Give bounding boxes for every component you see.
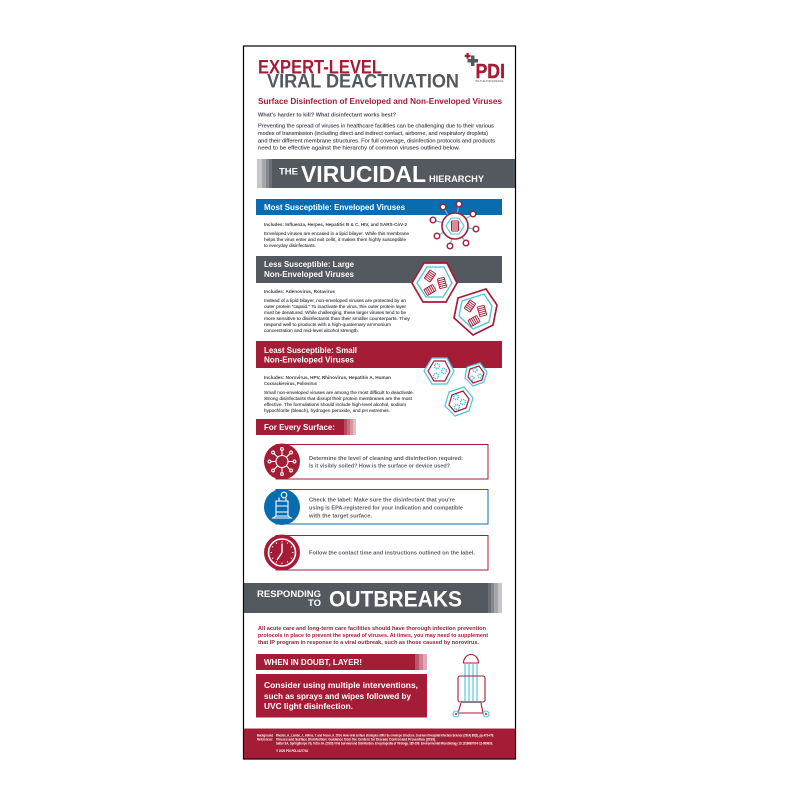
icon: large virus one — [412, 263, 457, 302]
logo: PDI — [465, 53, 505, 83]
intro paragraph: need to be effective against the hierarchy of common viruses outlined below. — [258, 146, 460, 152]
icon: virus in red circle — [264, 444, 300, 480]
step text: Determine the level of cleaning and disinfection required: — [309, 456, 463, 462]
title: EXPERT-LEVEL — [258, 56, 382, 78]
intro paragraph: and their different membrane structures. For full coverage, disinfection protocols and products — [258, 138, 495, 144]
icon: UVC light robot — [453, 654, 489, 717]
outbreak paragraph: All acute care and long-term care facilities should have thorough infection prevention — [258, 626, 487, 632]
footer: references: © 2020 PDI PDI-1127744 — [276, 749, 308, 753]
outbreak paragraph: protocols in place to prevent the spread of viruses. At times, you may need to supplement — [258, 633, 488, 639]
heading band: large non-enveloped viruses: Non-Enveloped Viruses — [264, 269, 354, 279]
section heading: for every surface — [256, 419, 356, 435]
logo: PDI: BE THE DIFFERENCE — [476, 79, 504, 83]
description: Instead of a lipid bilayer, non-enveloped viruses are protected by an — [264, 298, 406, 304]
description: must be denatured. While challenging, these larger viruses tend to be — [264, 310, 406, 316]
intro paragraph — [258, 124, 495, 152]
includes line: Coxsackievirus, Poliovirus — [264, 381, 317, 387]
description: Enveloped viruses are encased in a lipid bilayer. While this membrane — [264, 231, 409, 237]
includes line: Includes: Influenza, Herpes, Hepatitis B & C, HIV, and SARS-CoV-2 — [264, 222, 407, 228]
panel: most susceptible — [256, 199, 502, 249]
callout: consider multiple interventions: such as sprays and wipes followed by — [264, 692, 411, 701]
banner: responding to outbreaks — [244, 583, 502, 613]
description — [264, 298, 411, 334]
section heading: for every surface: For Every Surface: — [264, 422, 335, 432]
panel: less susceptible — [256, 256, 502, 335]
title — [258, 56, 459, 92]
outbreak paragraph: that IP program in response to a viral outbreak, such as those caused by norovirus. — [258, 640, 479, 646]
banner: the virucidal hierarchy: VIRUCIDAL — [301, 161, 426, 187]
icon: disinfectant canister — [264, 489, 300, 525]
description — [264, 390, 414, 414]
subtitle: Surface Disinfection of Enveloped and Non-Enveloped Viruses — [258, 96, 502, 106]
step text — [308, 498, 463, 520]
includes line: Includes: Norovirus, HPV, Rhinovirus, Hepatitis A, Human — [264, 375, 391, 381]
icon: small virus three — [445, 387, 473, 416]
icon: small virus one — [424, 358, 454, 384]
callout: consider multiple interventions: Consider using multiple interventions, — [264, 681, 418, 690]
callout heading: when in doubt, layer: WHEN IN DOUBT, LAYER! — [264, 658, 362, 667]
step text — [309, 456, 463, 470]
description: Small non-enveloped viruses are among the most difficult to deactivate. — [264, 390, 414, 396]
callout: consider multiple interventions — [256, 674, 427, 718]
lead question: What's harder to kill? What disinfectant works best? — [258, 112, 397, 118]
step text: Follow the contact time and instructions outlined on the label. — [309, 550, 475, 556]
description: more sensitive to disinfectants than their smaller counterparts. They — [264, 316, 411, 322]
intro paragraph: modes of transmission (including direct and indirect contact, airborne, and respiratory droplets) — [258, 131, 488, 137]
banner: responding to outbreaks: TO — [308, 598, 321, 609]
banner: the virucidal hierarchy — [257, 159, 515, 188]
description: Strong disinfectants that disrupt their protein membranes are the most — [264, 396, 413, 402]
heading band: enveloped viruses — [256, 199, 502, 215]
banner: responding to outbreaks: RESPONDING — [257, 589, 321, 600]
footer: references: Rhodes, A., Lambe, J., Atkins, T. and Fraser, A. 2014. How viral surface strategies differ by envelope structure. Journal of Hospital Infection Science (2014) 88(2), pp.473-478. — [276, 734, 494, 738]
banner: the virucidal hierarchy: HIERARCHY — [429, 174, 484, 184]
description: effective. The formulations should include high-level alcohol, sodium — [264, 402, 406, 408]
description: respond well to products with a high-quaternary ammonium — [264, 322, 391, 328]
includes line: Includes: Adenovirus, Rotavirus — [264, 289, 335, 295]
intro paragraph: Preventing the spread of viruses in healthcare facilities can be challenging due to their various — [258, 124, 494, 130]
step text: using is EPA-registered for your indication and compatible — [309, 506, 463, 512]
footer: references: References: — [257, 738, 273, 742]
banner: the virucidal hierarchy: THE — [279, 166, 298, 178]
icon: large virus two — [454, 289, 497, 335]
step text: with the target surface. — [308, 514, 372, 520]
includes line — [264, 375, 391, 387]
title: VIRAL DEACTIVATION — [267, 70, 459, 92]
icon: enveloped virus — [430, 201, 479, 249]
description: to everyday disinfectants. — [264, 243, 316, 249]
description: concentration and mid-level alcohol strength. — [264, 328, 359, 334]
logo: PDI: PDI — [476, 61, 505, 83]
heading band: enveloped viruses: Most Susceptible: Enveloped Viruses — [264, 202, 405, 212]
description: helps the virus enter and exit cells, it makes them highly susceptible — [264, 237, 406, 243]
description: outer protein "capsid." To inactivate the virus, this outer protein layer — [264, 304, 406, 310]
outbreak paragraph — [258, 626, 488, 646]
banner: responding to outbreaks: OUTBREAKS — [329, 586, 462, 612]
panel: least susceptible — [256, 341, 502, 416]
step: determine cleaning level — [264, 444, 488, 480]
step: check the label — [264, 489, 488, 525]
description: hypochlorite (bleach), hydrogen peroxide, and pH extremes. — [264, 408, 390, 414]
icon: small virus two — [465, 363, 487, 386]
heading band: small non-enveloped viruses — [256, 341, 502, 368]
heading band: large non-enveloped viruses: Less Susceptible: Large — [264, 259, 354, 269]
heading band: large non-enveloped viruses — [256, 256, 502, 283]
footer: references: Background — [257, 734, 273, 738]
footer: references: Viruses and Surface Disinfection: Guidance from the Centers for Disease Control and Prevention (2019). — [276, 738, 436, 742]
step text: Check the label: Make sure the disinfectant that you're — [309, 498, 455, 504]
footer: references: Sattar SA, Springthorpe VS, Tetro JA. (2020) Viral Survival and Disinfection. Encyclopedia of Virology. 185-198. Environmental Microbiology 10.1016/B978-0-12-809633. — [276, 742, 493, 746]
step text: Is it visibly soiled? How is the surface or device used? — [309, 464, 451, 470]
callout: consider multiple interventions: UVC light disinfection. — [264, 702, 353, 711]
heading band: small non-enveloped viruses: Non-Enveloped Viruses — [264, 354, 354, 364]
step: contact time — [264, 534, 488, 570]
callout heading: when in doubt, layer — [256, 654, 427, 670]
heading band: small non-enveloped viruses: Least Susceptible: Small — [264, 345, 357, 355]
description — [264, 231, 409, 249]
poster frame — [244, 46, 516, 759]
icon: clock — [264, 534, 300, 570]
footer: references — [244, 728, 515, 758]
